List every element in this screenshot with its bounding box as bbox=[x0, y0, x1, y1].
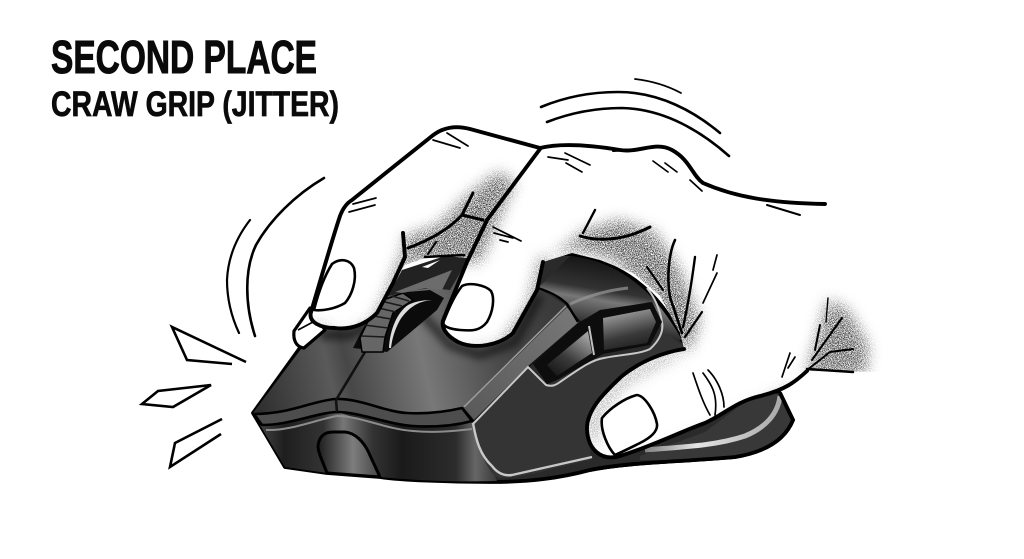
thumb nail bbox=[602, 395, 657, 455]
mouse body silhouette bbox=[253, 254, 793, 482]
shadow under fingers bbox=[320, 290, 540, 355]
light edge lines bbox=[464, 288, 662, 475]
title: SECOND PLACE bbox=[51, 31, 317, 83]
nails bbox=[314, 260, 355, 310]
wheel highlight bbox=[389, 300, 432, 348]
motion arcs: top right bbox=[541, 79, 729, 156]
ring finger behind bbox=[294, 308, 325, 348]
front face bbox=[260, 412, 497, 481]
centre seam bbox=[336, 352, 365, 412]
side strip bbox=[463, 306, 580, 421]
middle nail bbox=[443, 284, 493, 330]
gap between fingers bbox=[388, 256, 470, 296]
front notch bbox=[318, 432, 380, 477]
sliver of light between fingers bbox=[422, 260, 440, 268]
button divider bbox=[589, 326, 594, 355]
impact sparks bbox=[142, 327, 246, 467]
tail bbox=[640, 393, 793, 460]
tail stripe bbox=[645, 396, 780, 450]
side button rear bbox=[603, 309, 656, 350]
gap highlight bbox=[395, 270, 452, 293]
side button front bbox=[547, 331, 592, 376]
top plate bbox=[253, 262, 567, 414]
upper rear hump bbox=[538, 256, 682, 340]
side panel bbox=[474, 330, 684, 478]
wheel slot bbox=[353, 290, 444, 352]
side button frame bbox=[533, 302, 662, 384]
hand outline bbox=[311, 127, 853, 457]
motion arcs: left bbox=[227, 178, 324, 336]
tail outline bbox=[590, 393, 793, 470]
mouse bbox=[253, 254, 793, 482]
front stripe bbox=[266, 416, 472, 432]
hand fill bbox=[311, 127, 900, 457]
stippled shading bbox=[300, 172, 868, 470]
front lip bbox=[254, 399, 472, 426]
scroll wheel bbox=[360, 293, 413, 352]
subtitle: CRAW GRIP (JITTER) bbox=[51, 85, 339, 124]
creases bbox=[349, 133, 795, 415]
hand bbox=[300, 127, 900, 470]
